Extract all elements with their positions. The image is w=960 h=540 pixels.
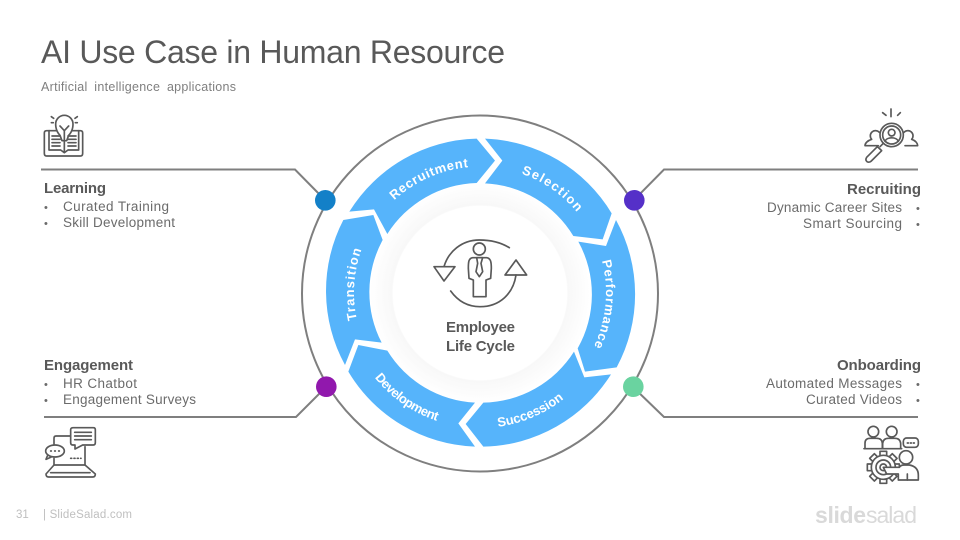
panel: recruiting: Dynamic Career Sites (767, 200, 902, 215)
panel: engagement: Engagement Surveys (63, 392, 196, 407)
segment: performance (578, 220, 636, 372)
footer: page number: 31 (16, 509, 29, 521)
panel: recruiting: • (916, 203, 920, 215)
panel: onboarding (766, 357, 921, 407)
life cycle ring (318, 138, 642, 447)
panel: onboarding: Curated Videos (806, 392, 902, 407)
panel: recruiting (767, 181, 921, 231)
footer: source: | SlideSalad.com (43, 509, 132, 521)
segment: recruitment: Recruitment (389, 158, 468, 200)
panel: engagement: • (44, 379, 48, 391)
marker: onboarding (623, 376, 644, 397)
center label: Employee (446, 319, 515, 336)
segment: selection: Selection (522, 166, 581, 212)
panel: onboarding: • (916, 395, 920, 407)
panel: learning: • (44, 218, 48, 230)
segment: transition: Transition (345, 248, 362, 322)
icon: learning book and bulb (44, 115, 83, 156)
segment: transition (326, 215, 383, 365)
marker: recruiting (624, 190, 645, 211)
segment: selection (485, 138, 612, 240)
panel: onboarding: • (916, 379, 920, 391)
panel: learning: Curated Training (63, 199, 169, 214)
panel: recruiting: Smart Sourcing (803, 216, 902, 231)
marker: engagement (316, 376, 337, 397)
segment: development (348, 345, 475, 447)
panel: recruiting: • (916, 219, 920, 231)
segment: recruitment (349, 138, 495, 234)
panel: engagement: HR Chatbot (63, 376, 137, 391)
connector: engagement (44, 387, 326, 417)
icon: engagement chat laptop (46, 428, 95, 477)
panel: learning: Learning (44, 180, 106, 197)
segment: development: Development (375, 372, 439, 421)
connector: recruiting (634, 170, 918, 200)
icon: onboarding team and gear (864, 426, 918, 483)
icon: employee cycle (434, 240, 527, 307)
marker: learning (315, 190, 336, 211)
panel: engagement: Engagement (44, 357, 133, 374)
outer ring (302, 116, 658, 472)
segment: performance: Performance (594, 260, 616, 348)
center label: Life Cycle (446, 338, 515, 355)
panel: recruiting: Recruiting (847, 181, 921, 198)
panel: onboarding: Automated Messages (766, 376, 902, 391)
panel: engagement (44, 357, 196, 407)
title: AI Use Case in Human Resource (41, 34, 505, 70)
connector: onboarding (633, 387, 918, 417)
panel: learning: • (44, 202, 48, 214)
subtitle: Artificial intelligence applications (41, 80, 236, 94)
panel: onboarding: Onboarding (837, 357, 921, 374)
logo: slidesalad (815, 502, 917, 528)
center disc (370, 183, 590, 403)
logo: slidesalad: slide (815, 502, 866, 528)
panel: learning: Skill Development (63, 215, 175, 230)
logo: slidesalad: salad (866, 502, 917, 528)
connector: learning (41, 170, 325, 200)
icon: recruiting magnifier (865, 109, 918, 162)
segment: succession (466, 352, 611, 447)
panel: learning (44, 180, 175, 230)
center label (446, 319, 515, 355)
segment: succession: Succession (498, 394, 564, 426)
panel: engagement: • (44, 395, 48, 407)
